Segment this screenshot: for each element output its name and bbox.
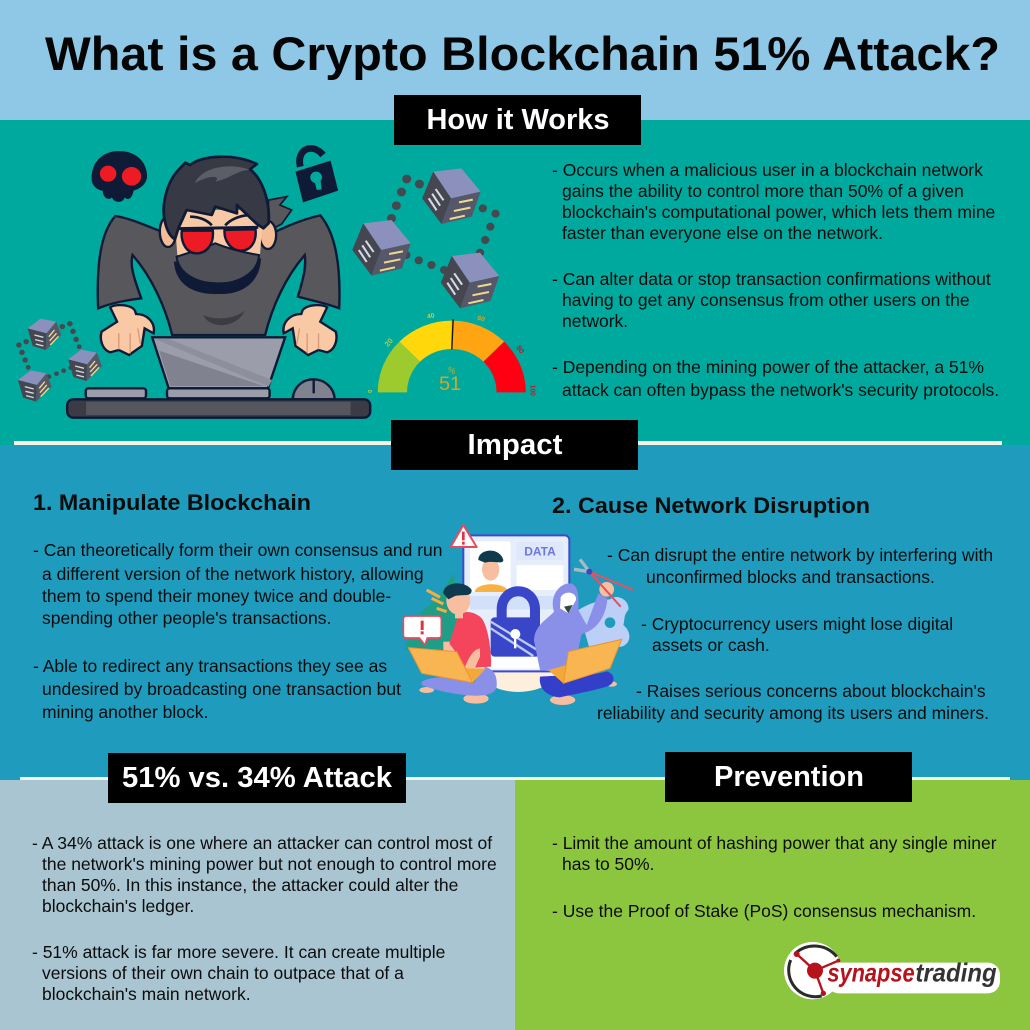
data tablet: DATA <box>524 544 556 558</box>
panel: title band <box>0 0 1030 120</box>
gauge at 51 percent: 51 <box>439 373 461 395</box>
text block: prevention bullets: - Limit the amount of hashing power that any single miner <box>552 833 997 853</box>
left hand <box>101 305 154 355</box>
text block: network disruption bullets: - Raises serious concerns about blockchain's <box>636 681 986 701</box>
text block: network disruption bullets: unconfirmed blocks and transactions. <box>646 567 935 587</box>
heading: Impact <box>391 420 638 470</box>
text block: 51% vs 34% bullets: the network's mining power but not enough to control more <box>42 854 497 874</box>
text block: 51% vs 34% bullets: versions of their own chain to outpace that of a <box>42 963 404 983</box>
heading: How it Works: How it Works <box>426 104 610 136</box>
blockchain cubes large <box>352 168 499 308</box>
subheading: manipulate blockchain: 1. Manipulate Blockchain <box>33 490 311 515</box>
red glasses <box>177 227 258 253</box>
text block: how it works bullets <box>552 160 999 400</box>
blockchain dots large <box>387 175 500 274</box>
heading: 51% vs. 34% Attack <box>108 753 406 803</box>
speech bubble alert <box>403 616 441 645</box>
panel: how it works background <box>0 120 1030 445</box>
text block: how it works bullets: attack can often bypass the network's security protocols. <box>562 380 999 400</box>
cream backdrop circle <box>456 567 581 692</box>
gauge at 51 percent: 20 <box>383 336 395 348</box>
skull behind hacker <box>578 597 629 650</box>
blockchain cubes small <box>18 319 102 402</box>
face mask <box>177 243 259 283</box>
hacker torso and arms <box>98 215 340 335</box>
text block: manipulate blockchain bullets: them to spend their money twice and double- <box>42 586 391 606</box>
title: What is a Crypto Blockchain 51% Attack? <box>45 27 1000 80</box>
gauge at 51 percent <box>368 312 535 396</box>
data tablet <box>463 535 569 671</box>
person in red shirt <box>408 583 497 704</box>
panel: impact background <box>0 445 1030 780</box>
padlock <box>491 591 540 657</box>
blockchain dots small <box>16 321 82 379</box>
text block: manipulate blockchain bullets: a different version of the network history, allowing <box>42 564 424 584</box>
logo: synapsetrading: trading <box>915 958 997 988</box>
right hand <box>283 305 337 355</box>
text block: how it works bullets: blockchain's computational power, which lets them mine <box>562 202 995 222</box>
panel: 51% vs 34% background <box>0 780 515 1030</box>
text block: prevention bullets <box>552 833 997 921</box>
laptop <box>152 337 285 388</box>
gauge at 51 percent: % <box>446 364 457 376</box>
text block: 51% vs 34% bullets: blockchain's main network. <box>42 984 251 1004</box>
heading: 51% vs. 34% Attack: 51% vs. 34% Attack <box>122 762 393 794</box>
keyboard and mouse on desk <box>67 379 370 418</box>
logo: synapsetrading: synapse <box>827 958 915 988</box>
subheading: cause network disruption: 2. Cause Network Disruption <box>552 493 870 518</box>
illustration: hacker at laptop <box>16 148 535 418</box>
icon: skull <box>92 151 147 202</box>
icon: open padlock <box>295 148 338 202</box>
warning triangle <box>451 525 477 547</box>
gauge at 51 percent: 0 <box>368 390 374 393</box>
illustration: data breach scene <box>403 525 633 705</box>
text block: how it works bullets: - Depending on the mining power of the attacker, a 51% <box>552 357 984 377</box>
text block: network disruption bullets: assets or cash. <box>652 635 770 655</box>
text block: 51% vs 34% bullets: than 50%. In this instance, the attacker could alter the <box>42 875 458 895</box>
hooded hacker <box>534 559 633 705</box>
text block: how it works bullets: faster than everyone else on the network. <box>562 223 883 243</box>
heading: Prevention <box>665 752 912 802</box>
gauge at 51 percent: 40 <box>426 312 435 321</box>
text block: how it works bullets: having to get any consensus from other users on the <box>562 290 970 310</box>
text block: manipulate blockchain bullets: - Able to redirect any transactions they see as <box>33 656 387 676</box>
text block: prevention bullets: has to 50%. <box>562 854 654 874</box>
text block: network disruption bullets: - Cryptocurrency users might lose digital <box>641 614 953 634</box>
text block: manipulate blockchain bullets: spending other people's transactions. <box>42 608 331 628</box>
text block: network disruption bullets: - Can disrupt the entire network by interfering with <box>607 545 993 565</box>
text block: how it works bullets: - Occurs when a malicious user in a blockchain network <box>552 160 983 180</box>
head and hood collar <box>160 157 292 294</box>
gauge at 51 percent: 100 <box>528 385 535 396</box>
text block: 51% vs 34% bullets: blockchain's ledger. <box>42 896 194 916</box>
text block: 51% vs 34% bullets: - 51% attack is far more severe. It can create multiple <box>32 942 445 962</box>
heading: How it Works <box>394 95 641 145</box>
text block: 51% vs 34% bullets <box>32 833 497 1004</box>
leaves <box>405 573 458 650</box>
text block: how it works bullets: network. <box>562 311 628 331</box>
gauge at 51 percent: 80 <box>514 344 527 355</box>
text block: 51% vs 34% bullets: - A 34% attack is one where an attacker can control most of <box>32 833 492 853</box>
heading: Prevention: Prevention <box>714 761 864 793</box>
text block: manipulate blockchain bullets: undesired by broadcasting one transaction but <box>42 679 401 699</box>
text block: manipulate blockchain bullets <box>33 540 443 722</box>
text block: manipulate blockchain bullets: mining another block. <box>42 702 208 722</box>
text block: network disruption bullets: reliability and security among its users and miners. <box>597 703 989 723</box>
panel: prevention background <box>515 780 1030 1030</box>
text block: how it works bullets: - Can alter data or stop transaction confirmations without <box>552 269 991 289</box>
gauge at 51 percent: 60 <box>476 315 486 324</box>
text block: network disruption bullets <box>597 545 993 723</box>
text block: how it works bullets: gains the ability to control more than 50% of a given <box>562 181 964 201</box>
text block: manipulate blockchain bullets: - Can theoretically form their own consensus and run <box>33 540 443 560</box>
heading: Impact: Impact <box>468 429 563 461</box>
logo: synapsetrading <box>784 942 1000 999</box>
text block: prevention bullets: - Use the Proof of Stake (PoS) consensus mechanism. <box>552 901 976 921</box>
